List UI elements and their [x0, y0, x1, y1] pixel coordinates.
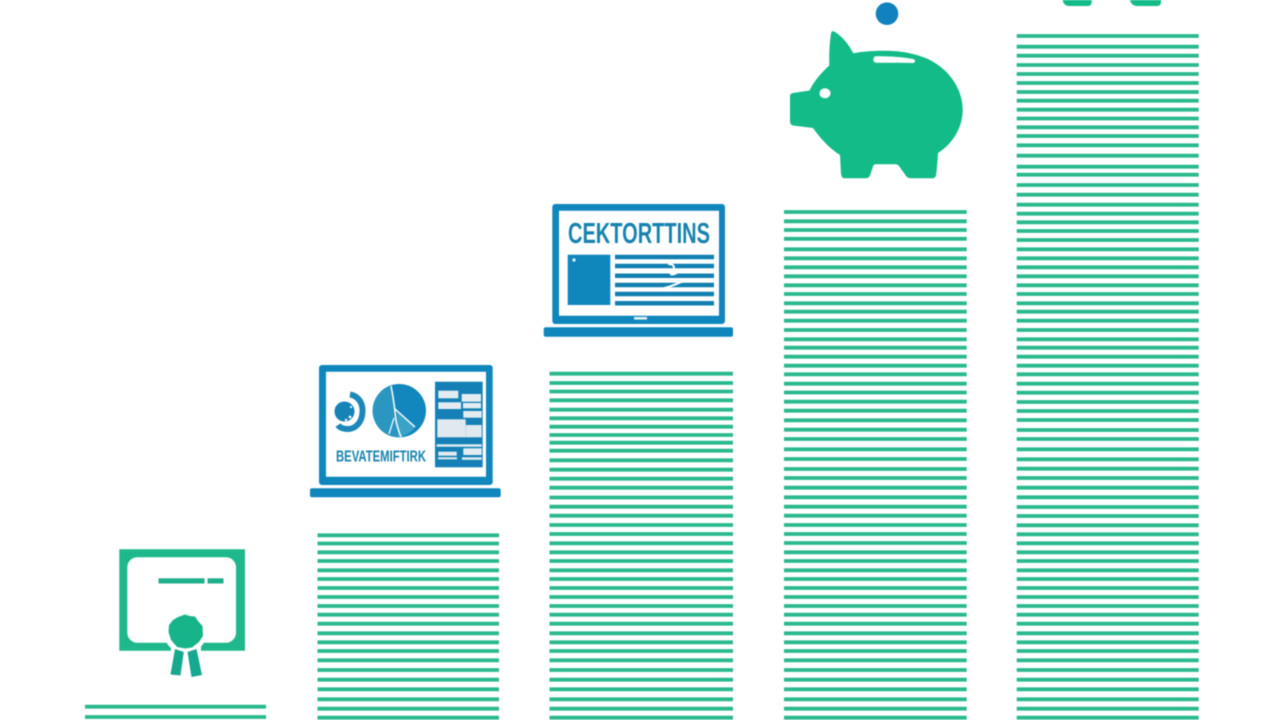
step 4: piggy bank and bar	[784, 2, 967, 718]
bar 1	[85, 707, 266, 717]
pig eye	[820, 88, 830, 98]
pig body	[790, 31, 963, 178]
pie chart	[373, 384, 426, 437]
coin	[876, 2, 898, 25]
step 1: certificate and bar	[85, 549, 266, 717]
icon: cropped feet at top edge	[1063, 0, 1161, 6]
icon: piggy bank with coin	[790, 2, 963, 178]
bar 4	[784, 212, 967, 718]
step 5: cropped icon and tallest bar	[1017, 0, 1199, 718]
laptop heading: CEKTORTTINS	[568, 218, 710, 250]
coin slot	[873, 56, 915, 63]
bar 5	[1017, 36, 1199, 718]
step 2: dashboard laptop and bar	[310, 365, 501, 718]
icon: laptop with document	[544, 204, 733, 337]
bar 2	[318, 535, 499, 718]
bar 3	[550, 374, 733, 718]
step 3: certifications laptop and bar	[544, 204, 733, 718]
donut chart	[334, 394, 363, 429]
icon: laptop with dashboard	[310, 365, 501, 497]
document text lines	[615, 257, 714, 303]
data table panel	[435, 382, 483, 467]
laptop caption: BEVATEMIFTIRK	[336, 448, 426, 466]
document image block	[568, 255, 610, 305]
icon: certificate	[119, 549, 245, 677]
